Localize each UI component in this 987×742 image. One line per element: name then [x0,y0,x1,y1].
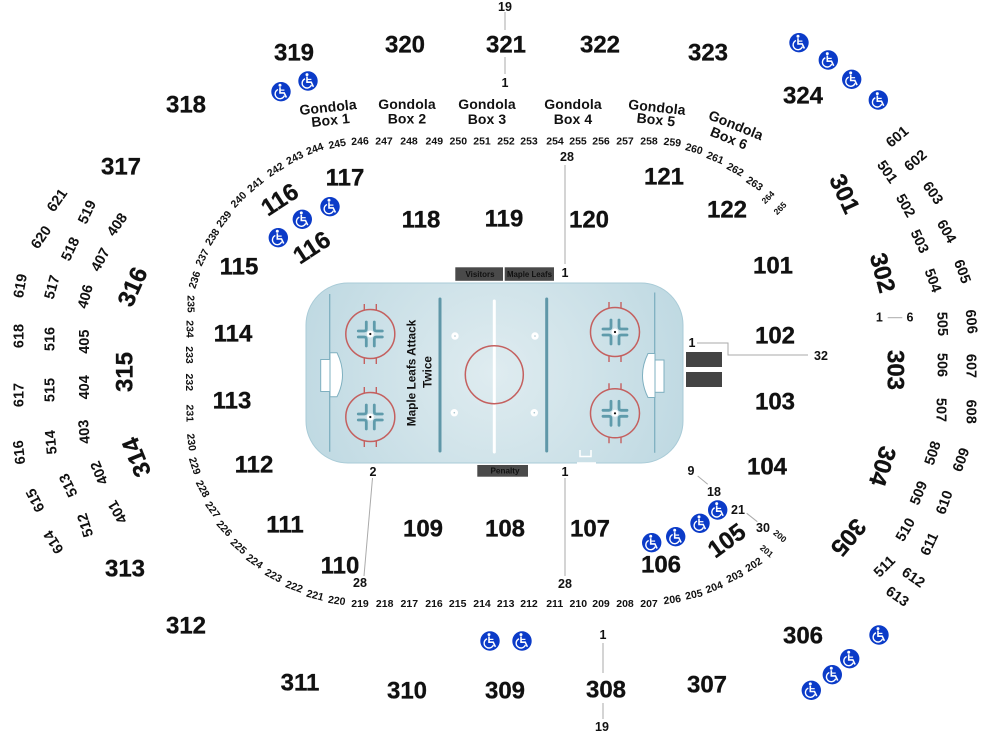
club seats ring 200 level: 222 [284,578,304,596]
west side 400, 500, 600 level sections: 408 [104,210,131,240]
east side 500 and 600 level sections: 612 [898,565,928,591]
club seats ring 200 level: 259 [663,136,682,150]
blue lines [440,299,547,451]
upper bowl section numbers: 315 [112,352,138,392]
club seats ring 200 level: 220 [327,594,346,608]
upper bowl section numbers: 314 [117,433,157,481]
icons: wheelchair accessible seating [269,33,889,700]
gondola box labels: Gondola [299,96,358,118]
club seats ring 200 level: 252 [497,136,515,148]
row numbers: 28 [353,576,367,590]
neutral zone dots [451,332,539,416]
club seats ring 200 level: 212 [520,598,538,610]
club seats ring 200 level: 223 [263,567,284,585]
lower bowl section numbers: 115 [220,254,258,280]
west side 400, 500, 600 level sections: 615 [23,486,49,514]
west side 400, 500, 600 level sections: 402 [88,458,112,487]
lower bowl section numbers: 120 [569,206,609,234]
rink text: Maple Leafs Attack Twice: Twice [421,356,435,388]
west side 400, 500, 600 level sections: 516 [43,327,59,351]
rink text: Maple Leafs Attack Twice: Maple Leafs Attack [405,319,419,426]
club seats ring 200 level: 202 [743,555,765,575]
upper bowl section numbers: 317 [101,154,141,180]
east side 500 and 600 level sections: 509 [907,479,931,508]
club seats ring 200 level: 205 [684,587,704,603]
lower bowl section numbers: 106 [641,552,681,578]
club seats ring 200 level: 206 [663,593,682,607]
bench: Maple Leafs: Maple Leafs [507,269,552,279]
east side 500 and 600 level sections: 502 [892,192,918,220]
club seats ring 200 level: 240 [229,189,250,210]
club seats ring 200 level: 242 [265,160,286,180]
club seats ring 200 level: 232 [183,374,195,391]
club seats ring 200 level: 253 [520,136,538,148]
upper bowl section numbers: 305 [825,513,871,561]
club seats ring 200 level: 263 [744,174,765,194]
lower bowl section numbers: 110 [321,552,359,580]
club seats ring 200 level: 217 [401,598,418,610]
row numbers: 30 [756,521,770,535]
gondola box labels: Box 3 [468,111,506,127]
east side 500 and 600 level sections: 608 [963,400,979,424]
club seats ring 200 level: 261 [705,149,726,167]
lower bowl section numbers: 114 [214,320,253,348]
east side 500 and 600 level sections: 605 [950,258,973,286]
east side 500 and 600 level sections: 606 [962,309,980,334]
east side 500 and 600 level sections: 510 [893,516,919,544]
club seats ring 200 level: 236 [187,270,203,290]
upper bowl section numbers: 312 [166,612,206,640]
lower bowl section numbers: 116 [256,178,304,222]
lower bowl section numbers: 104 [747,454,788,480]
west side 400, 500, 600 level sections: 407 [88,246,114,274]
club seats ring 200 level: 248 [400,136,418,148]
club seats ring 200 level: 251 [473,136,491,148]
row numbers: 1 [600,628,607,642]
east side 500 and 600 level sections: 508 [922,439,945,467]
row numbers: 1 [502,76,509,90]
club seats ring 200 level: 221 [305,588,325,604]
gondola box labels: Box 4 [554,111,592,127]
row numbers: 28 [558,577,572,591]
west side 400, 500, 600 level sections: 513 [57,471,81,499]
upper bowl section numbers: 320 [385,32,425,58]
club seats ring 200 level: 260 [684,141,704,157]
west side 400, 500, 600 level sections: 621 [44,186,71,215]
club seats ring 200 level: 211 [546,598,563,610]
lower bowl section numbers: 101 [753,252,793,280]
row numbers: 2 [370,465,377,479]
gondola box labels: Box 1 [310,110,351,130]
east side 500 and 600 level sections: 601 [883,123,912,151]
row numbers: 1 [562,266,569,280]
upper bowl section numbers: 301 [823,170,865,218]
upper bowl section numbers: 311 [281,670,319,696]
east side 500 and 600 level sections: 603 [919,179,946,208]
west side 400, 500, 600 level sections: 403 [76,419,94,444]
club seats ring 200 level: 231 [183,405,195,422]
upper bowl section numbers: 313 [105,556,145,582]
lower bowl section numbers: 116 [288,226,336,270]
lower bowl section numbers: 111 [266,512,304,538]
club seats ring 200 level: 250 [450,136,467,148]
lower bowl section numbers: 103 [755,388,795,416]
gondola box labels: Box 5 [636,110,676,129]
zamboni gate [577,450,596,463]
club seats ring 200 level: 218 [376,598,394,610]
club seats ring 200 level: 226 [214,518,234,539]
gondola box labels [299,96,766,153]
club seats ring 200 level: 210 [570,598,587,610]
gondola box labels: Gondola [378,96,436,112]
club seats ring 200 level: 249 [426,136,443,148]
club seats ring 200 level: 219 [351,598,369,610]
upper bowl section numbers: 308 [586,676,626,704]
west side 400, 500, 600 level sections: 619 [11,273,31,299]
club seats ring 200 level: 244 [305,141,325,158]
row numbers: 19 [595,720,609,734]
east side 500 and 600 level sections: 506 [934,353,950,377]
club seats ring 200 level: 247 [375,136,393,148]
east side 500 and 600 level sections: 511 [871,553,899,581]
east side 500 and 600 level sections: 607 [963,354,979,378]
club seats ring 200 level: 215 [449,598,467,610]
west side 400, 500, 600 level sections: 515 [43,378,59,402]
west side 400, 500, 600 level sections: 620 [28,223,55,252]
bench: Maple Leafs [505,267,554,281]
upper bowl section numbers: 306 [783,622,823,650]
row numbers: 21 [731,503,745,517]
gondola box labels: Gondola [628,96,687,118]
lower bowl section numbers: 117 [326,164,364,192]
club seats ring 200 level: 256 [592,136,610,148]
club seats ring 200 level: 264 [759,189,777,206]
club seats ring 200 level: 203 [725,567,746,586]
club seats ring 200 level: 207 [640,598,658,610]
right goal crease [642,354,664,398]
club seats ring 200 level: 265 [771,200,789,217]
club seats ring 200 level: 235 [185,295,197,313]
row numbers: 19 [498,0,512,14]
upper bowl section numbers: 302 [864,250,900,296]
upper bowl section numbers: 319 [274,40,314,66]
west side 400, 500, 600 level sections: 406 [75,283,97,310]
row numbers: 1 [562,465,569,479]
lower bowl section numbers: 113 [213,388,251,414]
club seats ring 200 level: 257 [616,136,634,148]
east end platform rectangles [686,352,722,387]
club seats ring 200 level: 213 [497,598,515,610]
center circle [465,346,523,404]
club seats ring 200 level: 214 [473,598,491,610]
west side 400, 500, 600 level sections: 405 [77,330,93,354]
lower bowl section numbers: 105 [703,518,751,564]
lower bowl section numbers: 109 [403,516,443,542]
east side 500 and 600 level sections: 611 [918,530,942,558]
lower bowl section numbers: 112 [235,452,273,478]
club seats ring 200 level: 224 [244,552,265,572]
left goal crease [321,353,342,397]
row numbers [353,0,914,734]
upper bowl section numbers: 324 [783,82,824,110]
ice surface [306,283,683,463]
club seats ring 200 level: 254 [546,136,564,148]
club seats ring 200 level: 229 [186,456,203,476]
upper bowl section numbers [101,32,908,704]
club seats ring 200 level: 234 [183,320,195,338]
upper bowl section numbers: 303 [882,350,908,390]
row numbers: 6 [907,310,914,324]
goal lines [330,292,655,453]
club seats ring 200 level: 228 [193,478,212,500]
east side 500 and 600 level sections [871,123,980,610]
club seats ring 200 level: 227 [202,499,222,521]
east side 500 and 600 level sections: 613 [882,584,912,610]
club seats ring 200 level: 237 [193,247,212,268]
west side 400, 500, 600 level sections [11,186,131,556]
east side 500 and 600 level sections: 604 [933,217,959,246]
row numbers: 1 [689,336,696,350]
faceoff circles [346,302,640,447]
club seats ring 200 level: 246 [351,135,369,148]
upper bowl section numbers: 318 [166,92,206,118]
lower bowl section numbers: 102 [755,322,795,350]
east side 500 and 600 level sections: 501 [873,158,900,187]
gondola box labels: Box 6 [708,123,750,153]
club seats ring 200 level: 230 [184,433,198,452]
west side 400, 500, 600 level sections: 517 [42,274,64,301]
rink text: Maple Leafs Attack Twice [405,319,435,426]
club seats ring 200 level: 233 [183,346,195,364]
upper bowl section numbers: 316 [113,263,153,311]
row numbers: 18 [707,485,721,499]
center line [493,301,496,452]
row numbers: 28 [560,150,574,164]
club seats ring 200 level: 204 [704,579,725,596]
upper bowl section numbers: 307 [687,672,727,698]
east side 500 and 600 level sections: 505 [933,312,950,336]
east side 500 and 600 level sections: 602 [902,147,930,175]
upper bowl section numbers: 310 [387,678,427,704]
bench: Visitors [455,267,503,281]
west side 400, 500, 600 level sections: 512 [75,511,97,539]
club seats ring 200 level: 238 [203,227,223,248]
gondola box labels: Gondola [458,96,516,112]
club seats ring 200 level: 239 [214,209,235,230]
club seats ring 200 level: 241 [245,175,266,195]
lower bowl section numbers: 108 [485,516,525,542]
lower bowl section numbers: 122 [707,196,747,224]
club seats ring 200 level: 216 [425,598,443,610]
rink [306,283,683,463]
east side 500 and 600 level sections: 503 [907,227,931,256]
east side 500 and 600 level sections: 507 [933,398,949,422]
club seats ring 200 level: 225 [228,536,249,557]
west side 400, 500, 600 level sections: 401 [105,497,131,526]
upper bowl section numbers: 322 [580,32,620,58]
west side 400, 500, 600 level sections: 614 [41,527,67,556]
club seats ring 200 level: 201 [758,543,776,560]
upper bowl section numbers: 321 [486,32,526,58]
west side 400, 500, 600 level sections: 404 [77,375,93,399]
penalty box [477,465,528,477]
club seats ring 200 level: 258 [640,136,658,148]
west side 400, 500, 600 level sections: 617 [11,383,27,407]
club seats ring 200 level: 245 [327,137,347,152]
west side 400, 500, 600 level sections: 616 [11,439,29,465]
east side 500 and 600 level sections: 610 [933,489,957,517]
penalty box: Penalty [490,466,520,476]
west side 400, 500, 600 level sections: 519 [75,198,100,227]
gondola box labels: Gondola [706,107,766,143]
west side 400, 500, 600 level sections: 618 [11,324,27,348]
club seats ring 200 level [183,135,789,610]
gondola box labels: Box 2 [388,110,426,126]
row indicator leader lines [364,12,902,719]
club seats ring 200 level: 262 [724,161,746,179]
west side 400, 500, 600 level sections: 518 [59,235,83,264]
club seats ring 200 level: 255 [569,136,587,148]
club seats ring 200 level: 208 [616,598,634,610]
west side 400, 500, 600 level sections: 514 [43,430,61,455]
row numbers: 32 [814,349,828,363]
club seats ring 200 level: 209 [592,598,610,610]
gondola box labels: Gondola [544,96,602,112]
lower bowl section numbers: 118 [402,206,440,234]
lower bowl section numbers [213,164,795,580]
upper bowl section numbers: 323 [688,40,728,66]
lower bowl section numbers: 119 [485,206,523,232]
upper bowl section numbers: 304 [863,443,901,490]
club seats ring 200 level: 243 [284,149,306,168]
bench: Visitors: Visitors [466,269,495,279]
lower bowl section numbers: 107 [570,516,610,542]
east side 500 and 600 level sections: 504 [921,267,944,295]
row numbers: 9 [688,464,695,478]
east side 500 and 600 level sections: 609 [950,446,973,474]
lower bowl section numbers: 121 [644,164,684,190]
club seats ring 200 level: 200 [771,528,789,545]
upper bowl section numbers: 309 [485,678,525,704]
row numbers: 1 [876,311,883,325]
